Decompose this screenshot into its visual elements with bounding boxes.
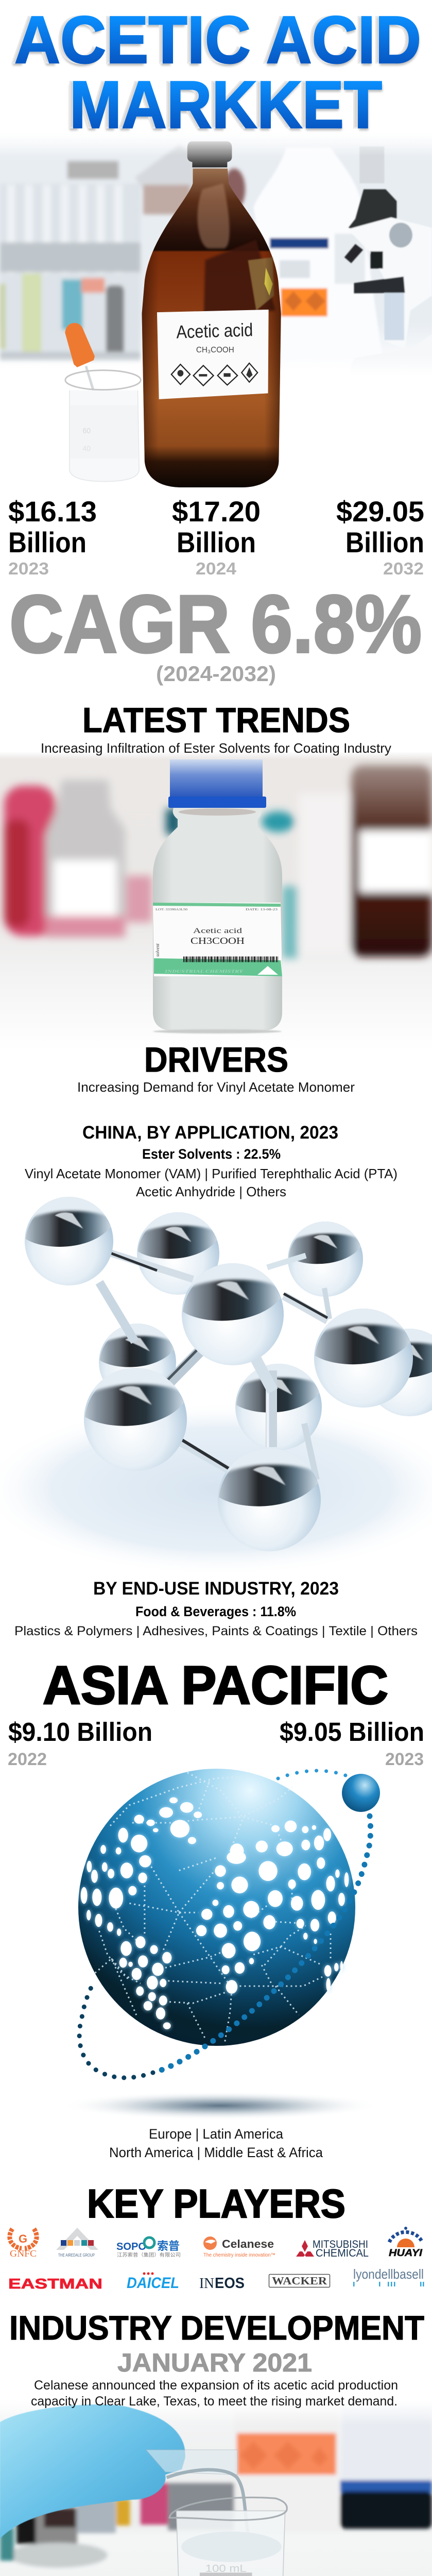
other regions list <box>109 2126 323 2160</box>
stat: 2032 market size <box>336 495 424 578</box>
dropper and beaker: 40 <box>82 445 91 453</box>
logo: Ineos: EOS <box>215 2275 245 2292</box>
bottle <box>142 141 281 487</box>
globe illustration <box>61 1769 380 2120</box>
title: Acetic Acid Market: ACETIC ACID <box>11 5 422 80</box>
logo: Celanese <box>203 2236 275 2258</box>
heading: Asia Pacific: ASIA PACIFIC <box>43 1655 388 1716</box>
logo: SOPO: SOPO <box>116 2241 146 2252</box>
logo: GNFC: GNFC <box>10 2248 37 2259</box>
logo: Ineos: IN <box>199 2275 214 2292</box>
heading: latest trends <box>41 701 391 756</box>
segment: China by application: CHINA, BY APPLICATION, 2023 <box>82 1123 338 1143</box>
heading: drivers: DRIVERS <box>144 1040 288 1079</box>
other regions list: Europe | Latin America <box>149 2126 284 2142</box>
segment: China by application: Vinyl Acetate Monomer (VAM) | Purified Terephthalic Acid (PTA) <box>25 1166 398 1181</box>
development description: capacity in Clear Lake, Texas, to meet the rising market demand. <box>31 2394 398 2409</box>
logo: Ineos <box>199 2275 245 2292</box>
segment: end-use industry: Food & Beverages : 11.8% <box>135 1604 296 1619</box>
molecule illustration: chrome spheres and bonds <box>0 1192 432 1577</box>
title: Acetic Acid Market: ACETIC ACID <box>11 2 418 77</box>
stat: 2024 market size: Billion <box>177 526 256 558</box>
other regions list: North America | Middle East & Africa <box>109 2145 323 2160</box>
logo: Celanese: Celanese <box>222 2238 274 2250</box>
central bottle: Acetic acid <box>193 927 243 935</box>
logo: GNFC <box>10 2229 37 2259</box>
segment: China by application: Ester Solvents : 22.5% <box>142 1146 281 1162</box>
stat: Asia Pacific 2022 <box>8 1717 152 1769</box>
central bottle: LOT: 33390A3L50 <box>155 908 187 911</box>
logo: GNFC: G <box>19 2232 27 2245</box>
central bottle <box>153 759 282 1033</box>
CAGR figure: (2024-2032) <box>156 662 276 686</box>
stat: 2024 market size: 2024 <box>196 559 237 578</box>
development description: Celanese announced the expansion of its acetic acid production <box>34 2378 398 2393</box>
stat: Asia Pacific 2022: $9.10 Billion <box>8 1717 152 1747</box>
dropper and beaker <box>65 323 141 481</box>
title: Acetic Acid Market: MARKKET <box>65 70 383 145</box>
beaker label <box>200 2563 252 2576</box>
stat: Asia Pacific 2022: 2022 <box>8 1750 47 1769</box>
central bottle: solvent <box>155 943 160 957</box>
logo: Mitsubishi Chemical: CHEMICAL <box>316 2247 369 2259</box>
logo: Daicel: DAICEL <box>127 2275 179 2292</box>
hero photo: acetic acid bottle in laboratory <box>0 132 432 494</box>
stat: 2023 market size: $16.13 <box>8 495 97 528</box>
stat: Asia Pacific 2023: 2023 <box>385 1750 424 1769</box>
title: Acetic Acid Market: MARKKET <box>70 67 382 142</box>
heading: drivers <box>77 1040 355 1095</box>
logo: The Airedale Group: THE AIREDALE GROUP <box>58 2253 95 2258</box>
central bottle: INDUSTRIAL CHEMISTRY <box>164 969 244 974</box>
stat: 2032 market size: $29.05 <box>336 495 424 528</box>
stat: 2023 market size: 2023 <box>8 559 49 578</box>
heading: latest trends: Increasing Infiltration of Ester Solvents for Coating Industry <box>41 740 391 756</box>
stat: 2024 market size: $17.20 <box>172 495 261 528</box>
beaker label: 100 mL <box>205 2563 247 2574</box>
date: January 2021: JANUARY 2021 <box>117 2348 312 2377</box>
logo: Mitsubishi Chemical: MITSUBISHI <box>313 2239 368 2250</box>
logo: The Airedale Group <box>56 2228 98 2258</box>
heading: latest trends: LATEST TRENDS <box>82 701 350 740</box>
dropper and beaker: 60 <box>82 427 91 435</box>
segment: end-use industry: Plastics & Polymers | Adhesives, Paints & Coatings | Textile | Others <box>14 1624 418 1638</box>
segment: China by application <box>25 1123 398 1199</box>
segment: China by application: Acetic Anhydride | Others <box>136 1184 286 1199</box>
heading: key players: KEY PLAYERS <box>87 2181 345 2226</box>
logo: Wacker: WACKER <box>272 2275 327 2287</box>
stat: 2024 market size <box>172 495 261 578</box>
logo: LyondellBasell: lyondellbasell <box>353 2266 424 2282</box>
logo: Huayi <box>389 2227 423 2259</box>
logo: Celanese: The chemistry inside innovation™ <box>203 2252 275 2258</box>
small orbiting sphere <box>342 1774 380 1812</box>
bottle label <box>157 310 269 399</box>
central bottle: CH3COOH <box>191 936 245 946</box>
logo: Mitsubishi Chemical <box>296 2239 369 2259</box>
segment: end-use industry <box>14 1579 418 1638</box>
stat: 2032 market size: Billion <box>345 526 424 558</box>
heading: drivers: Increasing Demand for Vinyl Acetate Monomer <box>77 1079 355 1095</box>
central bottle: DATE: 13-08-23 <box>246 908 278 911</box>
title: Acetic Acid Market: MARKKET <box>66 67 377 142</box>
stat: 2023 market size <box>8 495 97 578</box>
title: Acetic Acid Market: ACETIC ACID <box>14 2 421 77</box>
orbit dots <box>79 1771 371 2078</box>
logo: Huayi: HUAYI <box>389 2248 423 2259</box>
development description <box>31 2378 398 2409</box>
development photo: gloved hand pouring into beaker <box>0 2400 432 2576</box>
globe network lines <box>95 1772 331 2044</box>
stat: Asia Pacific 2023: $9.05 Billion <box>280 1717 424 1747</box>
trends photo: labelled bottle with blurred bottles behind <box>0 751 432 1051</box>
bottle label: CH₃COOH <box>196 346 234 354</box>
stat: Asia Pacific 2023 <box>280 1717 424 1769</box>
logo: SOPO <box>116 2238 181 2258</box>
stat: 2023 market size: Billion <box>8 526 87 558</box>
title: Acetic Acid Market <box>11 2 422 145</box>
logo: SOPO: 索普 <box>157 2240 180 2252</box>
segment: end-use industry: BY END-USE INDUSTRY, 2023 <box>93 1579 339 1599</box>
stat: 2032 market size: 2032 <box>383 559 424 578</box>
logo: Eastman: EASTMAN <box>8 2276 102 2292</box>
bottle label: Acetic acid <box>176 320 253 343</box>
logo: SOPO: 江苏索普（集团）有限公司 <box>117 2252 181 2258</box>
globe city dots <box>81 1798 349 2029</box>
